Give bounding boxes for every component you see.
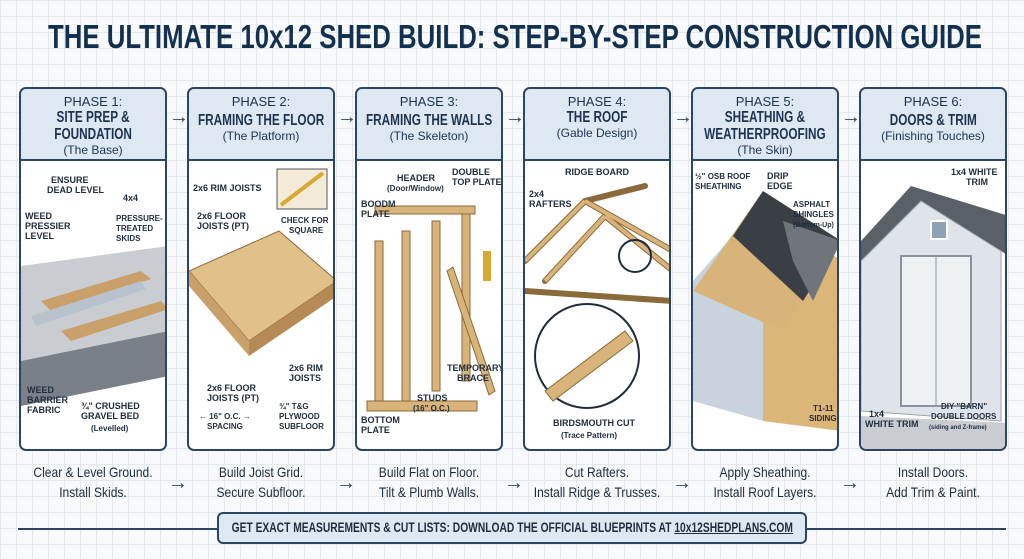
illustration: sheathing: DRIP — [767, 171, 789, 181]
header: phase 3 — [357, 89, 501, 161]
illustration: walls — [361, 167, 503, 435]
header: phase 6: PHASE 6: — [904, 94, 962, 109]
illustration: floor: 2x6 RIM — [289, 363, 323, 373]
illustration: floor: SPACING — [207, 422, 243, 431]
illustration: walls: STUDS — [417, 393, 448, 403]
step text 5: Apply Sheathing. — [719, 464, 811, 480]
illustration: floor: 2x6 RIM JOISTS — [193, 183, 262, 193]
header: phase 5: SHEATHING & — [725, 109, 805, 126]
step text 5 — [713, 464, 817, 500]
illustration: walls: (Door/Window) — [387, 184, 444, 193]
illustration: floor: 2x6 FLOOR — [197, 211, 247, 221]
illustration: walls: BOTTOM — [361, 415, 400, 425]
step text 2: Build Joist Grid. — [219, 464, 303, 480]
step text 6: Add Trim & Paint. — [886, 484, 980, 500]
header: phase 2: FRAMING THE FLOOR — [198, 112, 324, 129]
illustration: sheathing: SHINGLES — [793, 210, 835, 219]
illustration: sheathing: ASPHALT — [793, 200, 830, 209]
panel: phase 5 — [691, 87, 839, 451]
step text 3: Build Flat on Floor. — [379, 464, 479, 480]
illustration: floor — [189, 168, 333, 431]
illustration: foundation: SKIDS — [116, 234, 141, 243]
illustration: floor: SUBFLOOR — [279, 422, 324, 431]
illustration: shed: 1x4 WHITE — [951, 167, 998, 177]
header: phase 4: THE ROOF — [567, 109, 627, 126]
step text 1 — [33, 464, 153, 500]
illustration: walls: PLATE — [361, 425, 390, 435]
header: phase 1 — [21, 89, 165, 161]
illustration: roof: (Trace Pattern) — [561, 431, 617, 440]
illustration: foundation: GRAVEL BED — [81, 411, 140, 421]
arrow: → — [505, 106, 525, 128]
step text 4: Cut Rafters. — [565, 464, 629, 480]
illustration: roof — [525, 167, 669, 440]
illustration: floor: JOISTS — [289, 373, 321, 383]
illustration: foundation: WEED — [27, 385, 55, 395]
illustration: walls: BOODM — [361, 199, 396, 209]
illustration: sheathing: (Bottom-Up) — [793, 222, 834, 229]
illustration: shed: WHITE TRIM — [865, 419, 918, 429]
arrow: → — [169, 106, 189, 128]
illustration: shed — [861, 167, 1005, 449]
step text 2: Secure Subfloor. — [216, 484, 306, 500]
illustration: roof: RAFTERS — [529, 199, 572, 209]
illustration: foundation: PRESSURE- — [116, 214, 163, 223]
header: phase 5 — [693, 89, 837, 161]
header: phase 5: WEATHERPROOFING — [704, 126, 826, 143]
step text 1: Clear & Level Ground. — [33, 464, 153, 480]
panel: phase 2 — [187, 87, 335, 451]
illustration: foundation: ENSURE — [51, 175, 89, 185]
illustration: floor: ¾" T&G — [279, 402, 309, 411]
panel: phase 1 — [19, 87, 167, 451]
illustration: foundation: WEED — [25, 211, 53, 221]
illustration: sheathing — [693, 171, 837, 430]
step text 2 — [216, 464, 306, 500]
step text 1: Install Skids. — [59, 484, 127, 500]
step text 4 — [534, 464, 660, 500]
step text 6: Install Doors. — [898, 464, 968, 480]
header: phase 4: PHASE 4: — [568, 94, 626, 109]
illustration: sheathing: SIDING — [809, 414, 837, 423]
arrow: → — [168, 472, 188, 494]
illustration: sheathing: ½" OSB ROOF — [695, 172, 750, 181]
arrow: → — [337, 106, 357, 128]
header: phase 3: (The Skeleton) — [390, 129, 468, 143]
arrow: → — [336, 472, 356, 494]
illustration: floor: CHECK FOR — [281, 216, 329, 225]
header: phase 6: (Finishing Touches) — [881, 129, 985, 143]
illustration: foundation: TREATED — [116, 224, 153, 233]
step text 6 — [886, 464, 980, 500]
header: phase 6 — [861, 89, 1005, 161]
header: phase 3: PHASE 3: — [400, 94, 458, 109]
arrow: → — [504, 472, 524, 494]
arrow: → — [841, 106, 861, 128]
illustration: shed: DIY "BARN" — [941, 402, 987, 411]
header: phase 1: PHASE 1: — [64, 94, 122, 109]
header: phase 1: FOUNDATION — [54, 126, 132, 143]
illustration: walls: PLATE — [361, 209, 390, 219]
header: phase 5: (The Skin) — [737, 143, 793, 157]
header: phase 3: FRAMING THE WALLS — [366, 112, 492, 129]
panel: phase 3 — [355, 87, 503, 451]
footer banner: GET EXACT MEASUREMENTS & CUT LISTS: DOWNLOAD THE OFFICIAL BLUEPRINTS AT 10x12SHEDPLANS.COM — [231, 520, 793, 535]
header: phase 2: PHASE 2: — [232, 94, 290, 109]
illustration: shed: (siding and Z-frame) — [929, 425, 987, 431]
illustration: shed: 1x4 — [869, 409, 884, 419]
illustration: roof: BIRDSMOUTH CUT — [553, 418, 635, 428]
illustration: foundation: 4x4 — [123, 193, 138, 203]
illustration: foundation: ¾" CRUSHED — [81, 401, 140, 411]
illustration: foundation: PRESSIER — [25, 221, 71, 231]
header: phase 4: (Gable Design) — [557, 126, 637, 140]
illustration: shed: DOUBLE DOORS — [931, 412, 997, 421]
header: phase 4 — [525, 89, 669, 161]
illustration: foundation: (Levelled) — [91, 424, 129, 433]
illustration: walls: TOP PLATE — [452, 177, 502, 187]
illustration: foundation: DEAD LEVEL — [47, 185, 105, 195]
illustration: floor: 2x6 FLOOR — [207, 383, 257, 393]
illustration: foundation: BARRIER — [27, 395, 69, 405]
illustration: walls: DOUBLE — [452, 167, 490, 177]
illustration: foundation: LEVEL — [25, 231, 55, 241]
panel: phase 4 — [523, 87, 671, 451]
illustration: floor: PLYWOOD — [279, 412, 320, 421]
step text 5: Install Roof Layers. — [713, 484, 817, 500]
header: phase 1: SITE PREP & — [56, 109, 130, 126]
illustration: shed: TRIM — [966, 177, 988, 187]
illustration: walls: (16" O.C.) — [413, 404, 450, 413]
illustration: walls: BRACE — [457, 373, 489, 383]
header: phase 1: (The Base) — [63, 143, 123, 157]
footer banner — [217, 512, 807, 544]
illustration: walls: HEADER — [397, 173, 436, 183]
illustration: floor: JOISTS (PT) — [197, 221, 249, 231]
step text 4: Install Ridge & Trusses. — [534, 484, 660, 500]
illustration: floor: SQUARE — [289, 226, 324, 235]
arrow: → — [672, 472, 692, 494]
illustration: roof: 2x4 — [529, 189, 544, 199]
illustration: foundation: FABRIC — [27, 405, 61, 415]
illustration: sheathing: EDGE — [767, 181, 793, 191]
header: phase 6: DOORS & TRIM — [889, 112, 977, 129]
header: phase 2: (The Platform) — [223, 129, 299, 143]
illustration: foundation — [21, 175, 165, 433]
step text 3 — [379, 464, 479, 500]
header: phase 2 — [189, 89, 333, 161]
illustration: sheathing: SHEATHING — [695, 182, 742, 191]
illustration: sheathing: T1-11 — [813, 404, 834, 413]
panel: phase 6 — [859, 87, 1007, 451]
header: phase 5: PHASE 5: — [736, 94, 794, 109]
illustration: roof: RIDGE BOARD — [565, 167, 630, 177]
illustration: walls: TEMPORARY — [447, 363, 503, 373]
arrow: → — [673, 106, 693, 128]
illustration: floor: JOISTS (PT) — [207, 393, 259, 403]
arrow: → — [840, 472, 860, 494]
illustration: floor: ← 16" O.C. → — [199, 412, 251, 421]
step text 3: Tilt & Plumb Walls. — [379, 484, 479, 500]
